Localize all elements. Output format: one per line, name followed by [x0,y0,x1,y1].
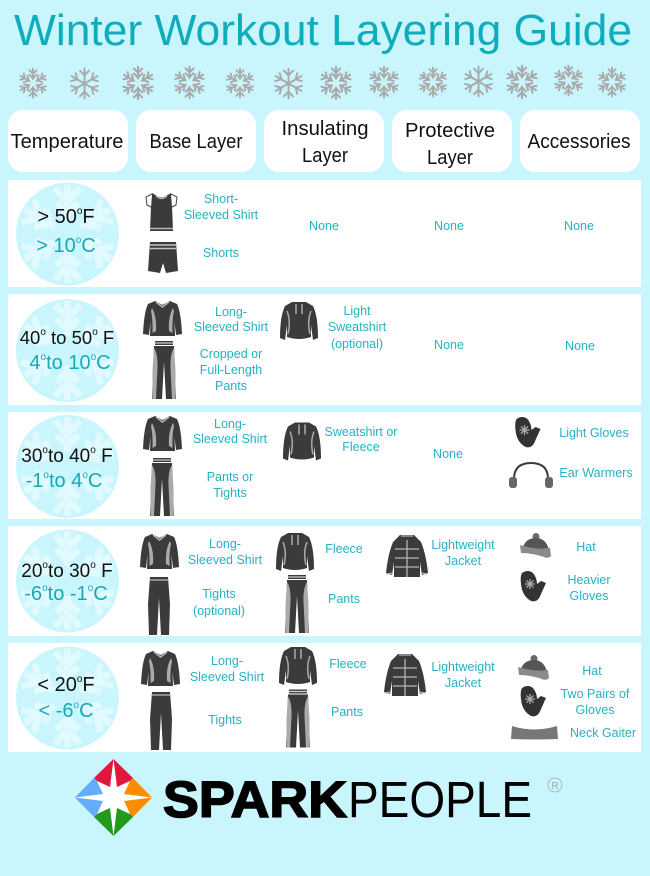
base layer clothing: Short- [204,192,238,206]
header: temperature: Temperature [10,130,124,153]
temperature badge: o [76,235,82,246]
base layer clothing: Pants [215,379,247,393]
logo wordmark: PEOPLE: PEOPLE [348,771,532,828]
accessories: Ear Warmers [559,466,633,480]
temperature badge: o [42,583,48,594]
base layer clothing: Cropped or [200,347,262,361]
temperature badge: F [82,674,95,696]
temperature badge: o [92,327,98,338]
header: temperature [8,110,128,172]
temperature badge: 40 [20,327,40,348]
temperature badge: o [41,352,47,363]
base layer clothing: Long- [214,417,246,431]
logo mark [75,759,152,836]
other columns: None [434,338,464,352]
header: base layer: Base Layer [150,130,243,153]
temperature badge: o [40,327,46,338]
registered mark: R [551,781,559,792]
temperature badge: to 40 [48,446,90,467]
protective layer [384,654,495,696]
temperature badge: > 10 [36,235,76,257]
temperature badge: to 4 [49,470,82,492]
header: insulating layer: Layer [302,144,348,167]
temperature badge: to -1 [48,583,88,605]
row: below 20F [8,643,641,752]
temperature badge: o [90,445,96,456]
base layer clothing: Sleeved Shirt [194,320,269,334]
temperature badge: F [82,206,95,228]
temperature badge: 30 [21,446,42,467]
accessories: Two Pairs of [561,687,630,701]
temperature badge: 4 [29,352,41,374]
other columns: None [565,339,595,353]
other columns: None [434,219,464,233]
accessories [511,655,636,740]
row: 40 to 50F [8,294,641,405]
temperature badge [16,415,119,518]
logo [75,759,562,836]
temperature badge: C [96,352,111,374]
header: protective layer [392,110,512,172]
temperature badge: F [98,327,114,348]
temperature badge: o [88,583,94,594]
base layer clothing: Pants or [207,470,253,484]
base layer clothing [141,651,265,750]
accessories: Heavier [567,573,611,587]
accessories: Hat [576,540,596,554]
base layer clothing [143,416,268,516]
insulating layer: Pants [328,592,360,606]
base layer clothing [140,534,263,635]
insulating layer: Light [343,304,371,318]
base layer clothing [146,192,259,273]
accessories: Hat [582,664,602,678]
header: insulating layer: Insulating [282,117,368,140]
header: protective layer: Protective [405,119,495,142]
header row [8,110,640,172]
insulating layer: Fleece [342,440,380,454]
temperature badge: -6 [24,583,42,605]
temperature badge: o [42,560,48,571]
temperature badge: 20 [21,561,42,582]
insulating layer [283,422,397,460]
other columns [434,338,595,353]
temperature badge [16,299,119,402]
insulating layer: (optional) [331,337,383,351]
insulating layer: Fleece [329,657,367,671]
protective layer: Lightweight [431,538,495,552]
temperature badge: o [90,560,96,571]
base layer clothing: Full-Length [200,363,262,377]
title: Winter Workout Layering Guide [14,6,632,55]
base layer clothing: Sleeved Shirt [193,432,268,446]
temperature badge [16,646,119,750]
row: above 50F [8,180,641,287]
insulating layer: Sweatshirt [328,320,387,334]
base layer clothing: Long- [215,305,247,319]
base layer clothing: Sleeved Shirt [188,553,263,567]
temperature badge: C [79,700,94,722]
header: protective layer: Layer [427,146,473,169]
temperature badge [16,182,119,286]
temperature badge: o [77,674,83,685]
temperature badge: C [93,583,108,605]
accessories [509,417,633,488]
accessories: Light Gloves [559,426,629,440]
temperature badge: F [96,446,113,467]
registered mark [548,778,562,792]
temperature badge: to 30 [48,561,90,582]
temperature badge: to 10 [46,352,91,374]
insulating layer [279,647,367,748]
other columns: None [564,219,594,233]
insulating layer: Sweatshirt or [325,425,397,439]
header: accessories [520,110,640,172]
row: 20 to 30F [8,526,641,636]
protective layer: Jacket [445,554,482,568]
logo wordmark: SPARK: SPARK [163,771,347,828]
temperature badge: < 20 [37,674,77,696]
temperature badge: F [96,561,113,582]
temperature badge [16,530,119,632]
base layer clothing: Sleeved Shirt [184,208,259,222]
temperature badge: o [43,470,49,481]
base layer clothing: Tights [208,713,242,727]
insulating layer: Pants [331,705,363,719]
insulating layer: Fleece [325,542,363,556]
temperature badge: > 50 [37,206,77,228]
temperature badge: o [91,352,97,363]
accessories: Gloves [576,703,614,717]
temperature badge: o [74,700,80,711]
base layer clothing [143,301,269,399]
snowflake row [19,66,626,99]
header: insulating layer [264,110,384,172]
base layer clothing: Tights [202,587,236,601]
temperature badge: < -6 [38,700,74,722]
accessories: Gloves [570,589,608,603]
protective layer: Jacket [445,676,482,690]
temperature badge: o [77,206,83,217]
protective layer: None [433,447,463,461]
other columns: None [309,219,339,233]
base layer clothing: Tights [213,486,247,500]
protective layer [386,535,495,577]
base layer clothing: Shorts [203,246,239,260]
other columns [309,219,594,233]
insulating layer [280,302,387,351]
base layer clothing: Long- [211,654,243,668]
row: 30 to 40F [8,412,641,519]
temperature badge: -1 [26,470,43,492]
accessories [520,533,611,603]
temperature badge: C [88,470,102,492]
base layer clothing: Long- [209,537,241,551]
base layer clothing: (optional) [193,604,245,618]
base layer clothing: Sleeved Shirt [190,670,265,684]
temperature badge: C [81,235,96,257]
header: base layer [136,110,256,172]
temperature badge: o [42,445,48,456]
header: accessories: Accessories [528,130,630,153]
insulating layer [276,533,363,633]
protective layer: Lightweight [431,660,495,674]
temperature badge: to 50 [46,327,92,348]
temperature badge: o [82,470,88,481]
accessories: Neck Gaiter [570,726,636,740]
